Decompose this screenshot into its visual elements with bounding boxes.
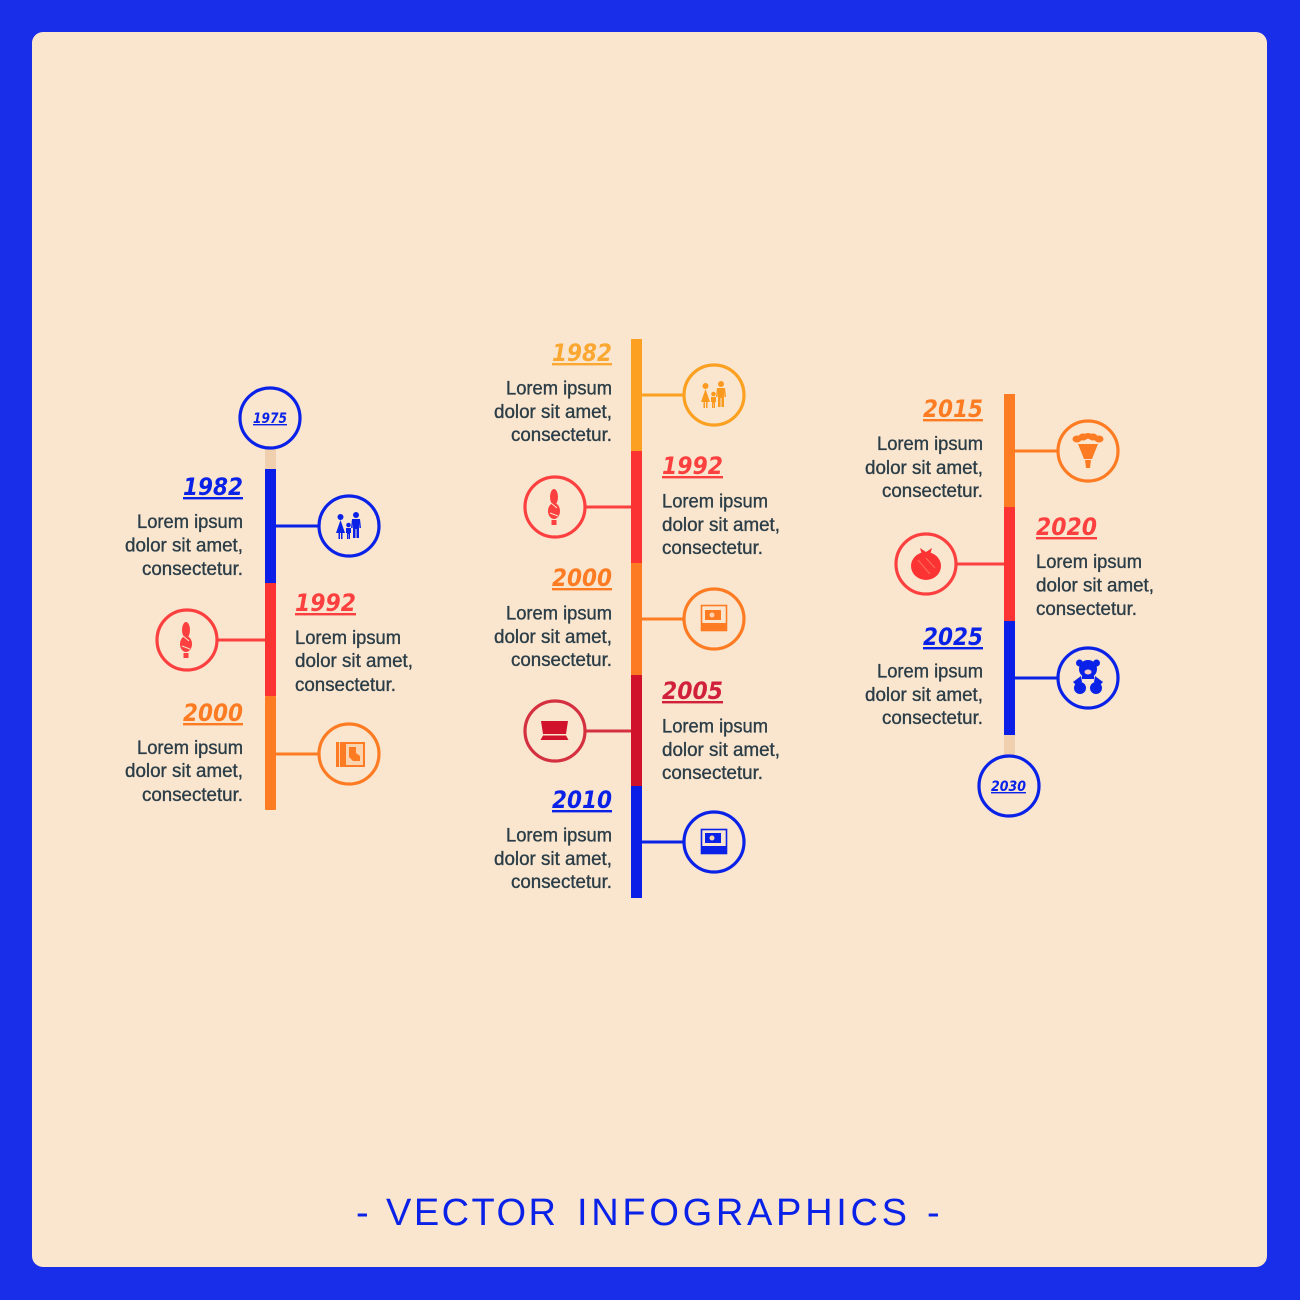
segment: 2020 (896, 507, 1154, 621)
segment: 2010: Lorem ipsum (506, 824, 612, 846)
icon: family (336, 512, 361, 539)
icon: photo album (701, 606, 727, 631)
segment: 2015 (865, 394, 1118, 507)
segment: 2015: 2015 (923, 395, 983, 423)
segment: 2005 (525, 675, 780, 786)
segment: 1992: Lorem ipsum (295, 627, 401, 649)
segment: 2025: Lorem ipsum (877, 660, 983, 682)
segment: 2005: Lorem ipsum (662, 716, 768, 738)
icon: camera album (701, 830, 727, 854)
segment: 1992: Lorem ipsum (662, 490, 768, 512)
start circle: 1975: 1975 (253, 411, 287, 427)
segment: 1992: dolor sit amet, (295, 650, 413, 672)
icon: knot (548, 489, 560, 525)
icon: pomegranate (911, 548, 941, 580)
segment: 1992: consectetur. (662, 537, 763, 559)
segment: 2010: dolor sit amet, (494, 848, 612, 870)
segment: 2000: dolor sit amet, (494, 626, 612, 648)
segment: 2015: dolor sit amet, (865, 457, 983, 479)
segment: 2015: consectetur. (882, 480, 983, 502)
start circle: 1975 (240, 388, 300, 469)
segment: 2000: 2000 (183, 699, 243, 727)
segment: 1982: consectetur. (511, 424, 612, 446)
segment: 2000: consectetur. (511, 649, 612, 671)
segment: 1982 (125, 469, 379, 583)
segment: 1982: dolor sit amet, (125, 534, 243, 556)
timeline: left column (125, 388, 413, 810)
end circle: 2030 (979, 735, 1039, 816)
segment: 1982: 1982 (552, 339, 612, 367)
end circle: 2030: 2030 (991, 779, 1026, 795)
segment: 2025 (865, 621, 1118, 735)
segment: 2005: 2005 (662, 677, 723, 705)
segment: 1992: 1992 (295, 589, 356, 617)
segment: 2000: Lorem ipsum (506, 602, 612, 624)
title: - (927, 1192, 940, 1234)
segment: 2025: dolor sit amet, (865, 684, 983, 706)
segment: 2000: 2000 (552, 564, 612, 592)
segment: 2025: 2025 (923, 623, 983, 651)
timeline: right column (865, 394, 1154, 816)
segment: 2005: dolor sit amet, (662, 739, 780, 761)
icon: bouquet (1072, 433, 1104, 468)
title: - (356, 1192, 369, 1234)
segment: 2020: 2020 (1036, 513, 1097, 541)
segment: 2010: consectetur. (511, 871, 612, 893)
timeline: center column (494, 339, 780, 898)
segment: 1982 (494, 339, 744, 451)
segment: 1992: 1992 (662, 452, 723, 480)
segment: 2010: 2010 (552, 786, 612, 814)
icon: family (701, 381, 726, 408)
icon: knot (180, 622, 192, 658)
segment: 1982: Lorem ipsum (137, 511, 243, 533)
segment: 2000 (494, 563, 744, 675)
segment: 2000 (125, 696, 379, 810)
segment: 2000: dolor sit amet, (125, 760, 243, 782)
icon: teddy bear (1073, 660, 1103, 694)
segment: 1982: 1982 (183, 473, 243, 501)
segment: 2020: Lorem ipsum (1036, 551, 1142, 573)
segment: 1982: Lorem ipsum (506, 378, 612, 400)
segment: 2010 (494, 786, 744, 898)
segment: 2015: Lorem ipsum (877, 433, 983, 455)
title: VECTOR (386, 1192, 556, 1234)
segment: 1982: consectetur. (142, 558, 243, 580)
segment: 2020: dolor sit amet, (1036, 574, 1154, 596)
segment: 1992 (157, 583, 413, 696)
segment: 1992 (525, 451, 780, 563)
segment: 2005: consectetur. (662, 762, 763, 784)
icon: book (336, 742, 365, 767)
segment: 2020: consectetur. (1036, 598, 1137, 620)
segment: 2025: consectetur. (882, 707, 983, 729)
segment: 1992: consectetur. (295, 674, 396, 696)
segment: 1982: dolor sit amet, (494, 401, 612, 423)
title: INFOGRAPHICS (577, 1192, 907, 1234)
segment: 1992: dolor sit amet, (662, 514, 780, 536)
segment: 2000: Lorem ipsum (137, 737, 243, 759)
icon: open box (540, 721, 568, 740)
segment: 2000: consectetur. (142, 784, 243, 806)
